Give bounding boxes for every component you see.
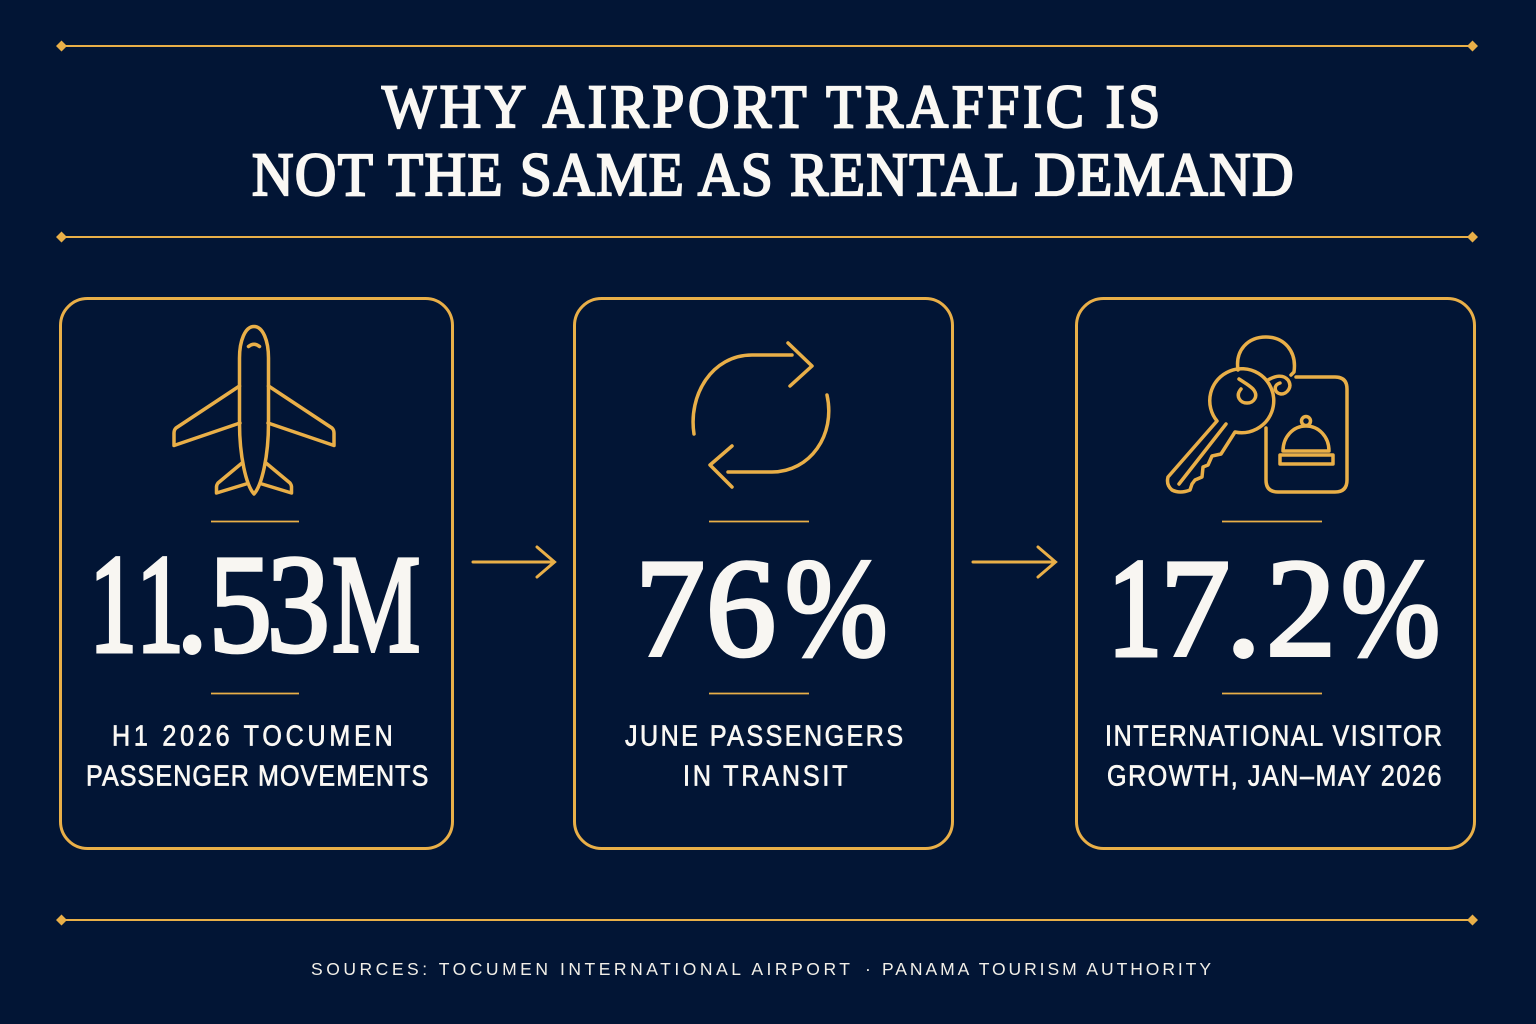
icon: key with hotel tag [1168,337,1347,492]
statistic: 17.2%: % [1341,531,1440,686]
label: transit passengers: JUNE PASSENGERS [625,720,903,752]
arrow: first to second panel [473,547,554,577]
label: international visitor growth [1105,720,1442,792]
footer divider [56,914,1478,926]
arrow: second to third panel [973,547,1056,577]
title divider [56,232,1478,242]
statistic: 76%: % [785,530,888,686]
statistic: 17.2% [1108,531,1440,686]
statistic: 76%: 76 [635,531,776,686]
statistic: 17.2%: 7.2 [1160,531,1336,686]
sources [311,959,1211,979]
statistic: 11.53M: 11 [90,526,184,682]
label: passenger movements: PASSENGER MOVEMENTS [86,760,428,792]
label: international visitor growth: GROWTH, JAN–MAY 2026 [1107,760,1441,792]
sources: PANAMA TOURISM AUTHORITY [882,959,1211,979]
label: passenger movements: H1 2026 TOCUMEN [112,720,393,752]
label: international visitor growth: INTERNATIONAL VISITOR [1105,720,1442,752]
statistic: 17.2%: 1 [1108,532,1162,686]
title: NOT THE SAME AS RENTAL DEMAND [252,140,1294,208]
icon: circular arrows [693,343,829,487]
label: transit passengers [625,720,903,792]
top divider [56,40,1478,52]
sources: · [865,959,871,979]
panel: international visitor growth [1076,298,1474,848]
icon: airplane [174,326,334,494]
label: passenger movements [86,720,428,792]
sources: SOURCES: TOCUMEN INTERNATIONAL AIRPORT [311,959,850,979]
panel: transit passengers [574,298,952,848]
statistic: 11.53M: M [332,528,420,682]
title [252,72,1294,208]
panel: passenger movements [60,298,452,848]
statistic: 11.53M: .53 [176,526,330,681]
statistic: 76% [635,530,888,686]
label: transit passengers: IN TRANSIT [683,760,848,792]
statistic: 11.53M [90,526,420,682]
title: WHY AIRPORT TRAFFIC IS [382,72,1160,140]
